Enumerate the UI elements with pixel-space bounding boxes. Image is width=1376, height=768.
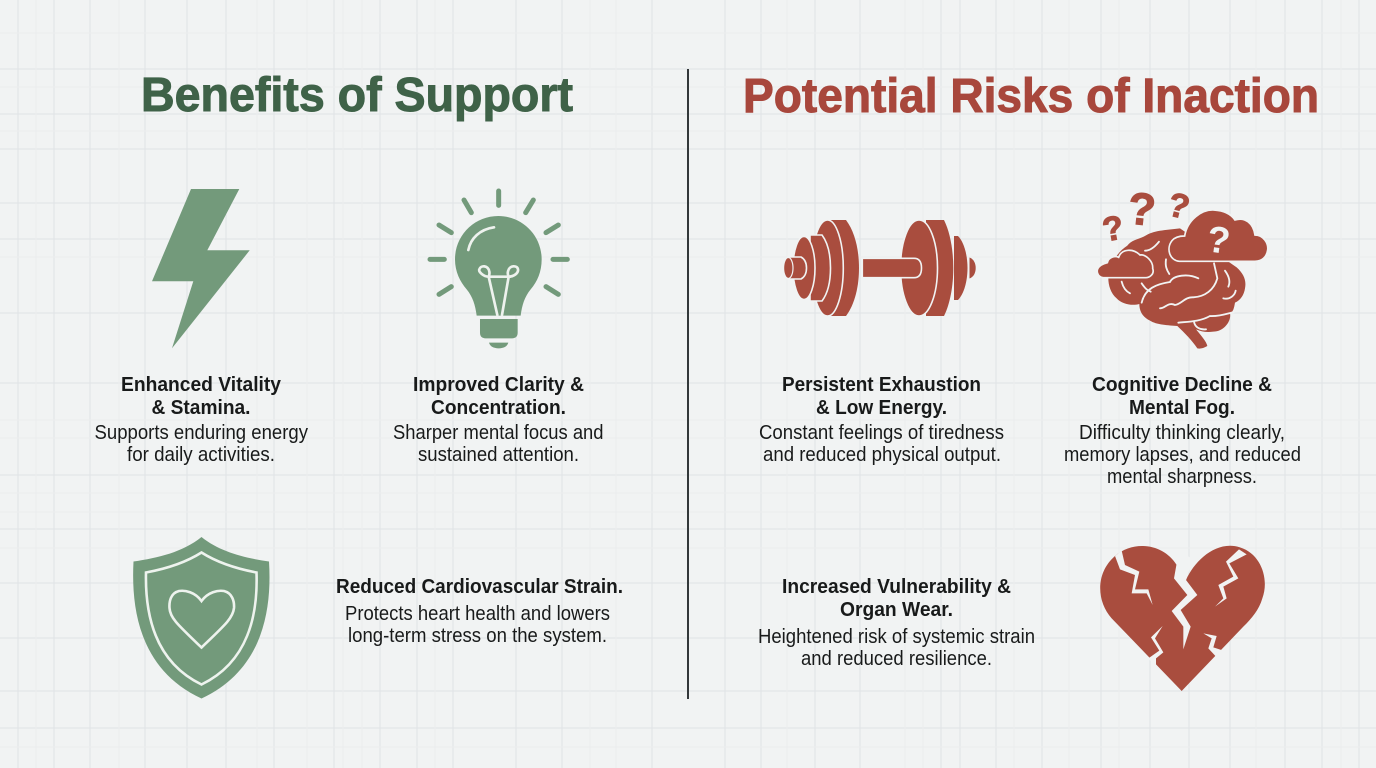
center divider xyxy=(687,69,689,699)
panel: benefits of support xyxy=(94,69,623,698)
icon: shield with heart xyxy=(133,537,270,698)
text: enhanced vitality and stamina: Supports enduring energy xyxy=(94,421,309,444)
icon: dumbbell xyxy=(784,220,976,316)
text: improved clarity and concentration: Improved Clarity & xyxy=(413,373,584,396)
text: reduced cardiovascular strain: long-term stress on the system. xyxy=(348,624,607,647)
icon: light bulb xyxy=(430,191,567,348)
text: reduced cardiovascular strain xyxy=(336,575,623,647)
text: improved clarity and concentration xyxy=(393,373,604,466)
text: cognitive decline and mental fog: Cognitive Decline & xyxy=(1092,373,1272,396)
question marks: ? xyxy=(1204,217,1233,262)
text: persistent exhaustion and low energy: Constant feelings of tiredness xyxy=(759,421,1004,444)
text: enhanced vitality and stamina xyxy=(94,373,309,466)
text: enhanced vitality and stamina: & Stamina. xyxy=(152,396,250,419)
icon: broken heart xyxy=(1100,546,1265,691)
text: improved clarity and concentration: Sharper mental focus and xyxy=(393,421,604,444)
icon: brain with clouds and question marks xyxy=(1097,182,1268,349)
text: enhanced vitality and stamina: Enhanced Vitality xyxy=(121,373,282,396)
text: cognitive decline and mental fog: Mental Fog. xyxy=(1129,396,1235,419)
text: cognitive decline and mental fog: memory lapses, and reduced xyxy=(1064,443,1301,466)
text: increased vulnerability and organ wear: and reduced resilience. xyxy=(801,647,992,670)
text: persistent exhaustion and low energy: Persistent Exhaustion xyxy=(782,373,981,396)
text: reduced cardiovascular strain: Reduced Cardiovascular Strain. xyxy=(336,575,623,598)
text: cognitive decline and mental fog xyxy=(1064,373,1301,488)
panel: potential risks of inaction xyxy=(743,70,1319,691)
text: cognitive decline and mental fog: Difficulty thinking clearly, xyxy=(1079,421,1285,444)
text: increased vulnerability and organ wear: Increased Vulnerability & xyxy=(782,575,1011,598)
question marks: ? xyxy=(1164,185,1193,227)
text: improved clarity and concentration: Concentration. xyxy=(431,396,566,419)
question marks: ? xyxy=(1125,182,1158,236)
icon: lightning bolt xyxy=(152,189,250,348)
text: increased vulnerability and organ wear xyxy=(758,575,1035,670)
text: increased vulnerability and organ wear: Organ Wear. xyxy=(840,598,953,621)
text: improved clarity and concentration: sustained attention. xyxy=(418,443,579,466)
text: persistent exhaustion and low energy xyxy=(759,373,1004,466)
text: persistent exhaustion and low energy: and reduced physical output. xyxy=(763,443,1001,466)
question marks: ? xyxy=(1100,208,1127,249)
text: cognitive decline and mental fog: mental sharpness. xyxy=(1107,465,1257,488)
text: increased vulnerability and organ wear: Heightened risk of systemic strain xyxy=(758,625,1035,648)
heading: potential risks of inaction: Potential Risks of Inaction xyxy=(743,70,1319,123)
text: persistent exhaustion and low energy: & Low Energy. xyxy=(816,396,947,419)
question marks xyxy=(1100,182,1233,262)
text: enhanced vitality and stamina: for daily activities. xyxy=(127,443,275,466)
text: reduced cardiovascular strain: Protects heart health and lowers xyxy=(345,602,610,625)
heading: benefits of support: Benefits of Support xyxy=(141,69,573,122)
